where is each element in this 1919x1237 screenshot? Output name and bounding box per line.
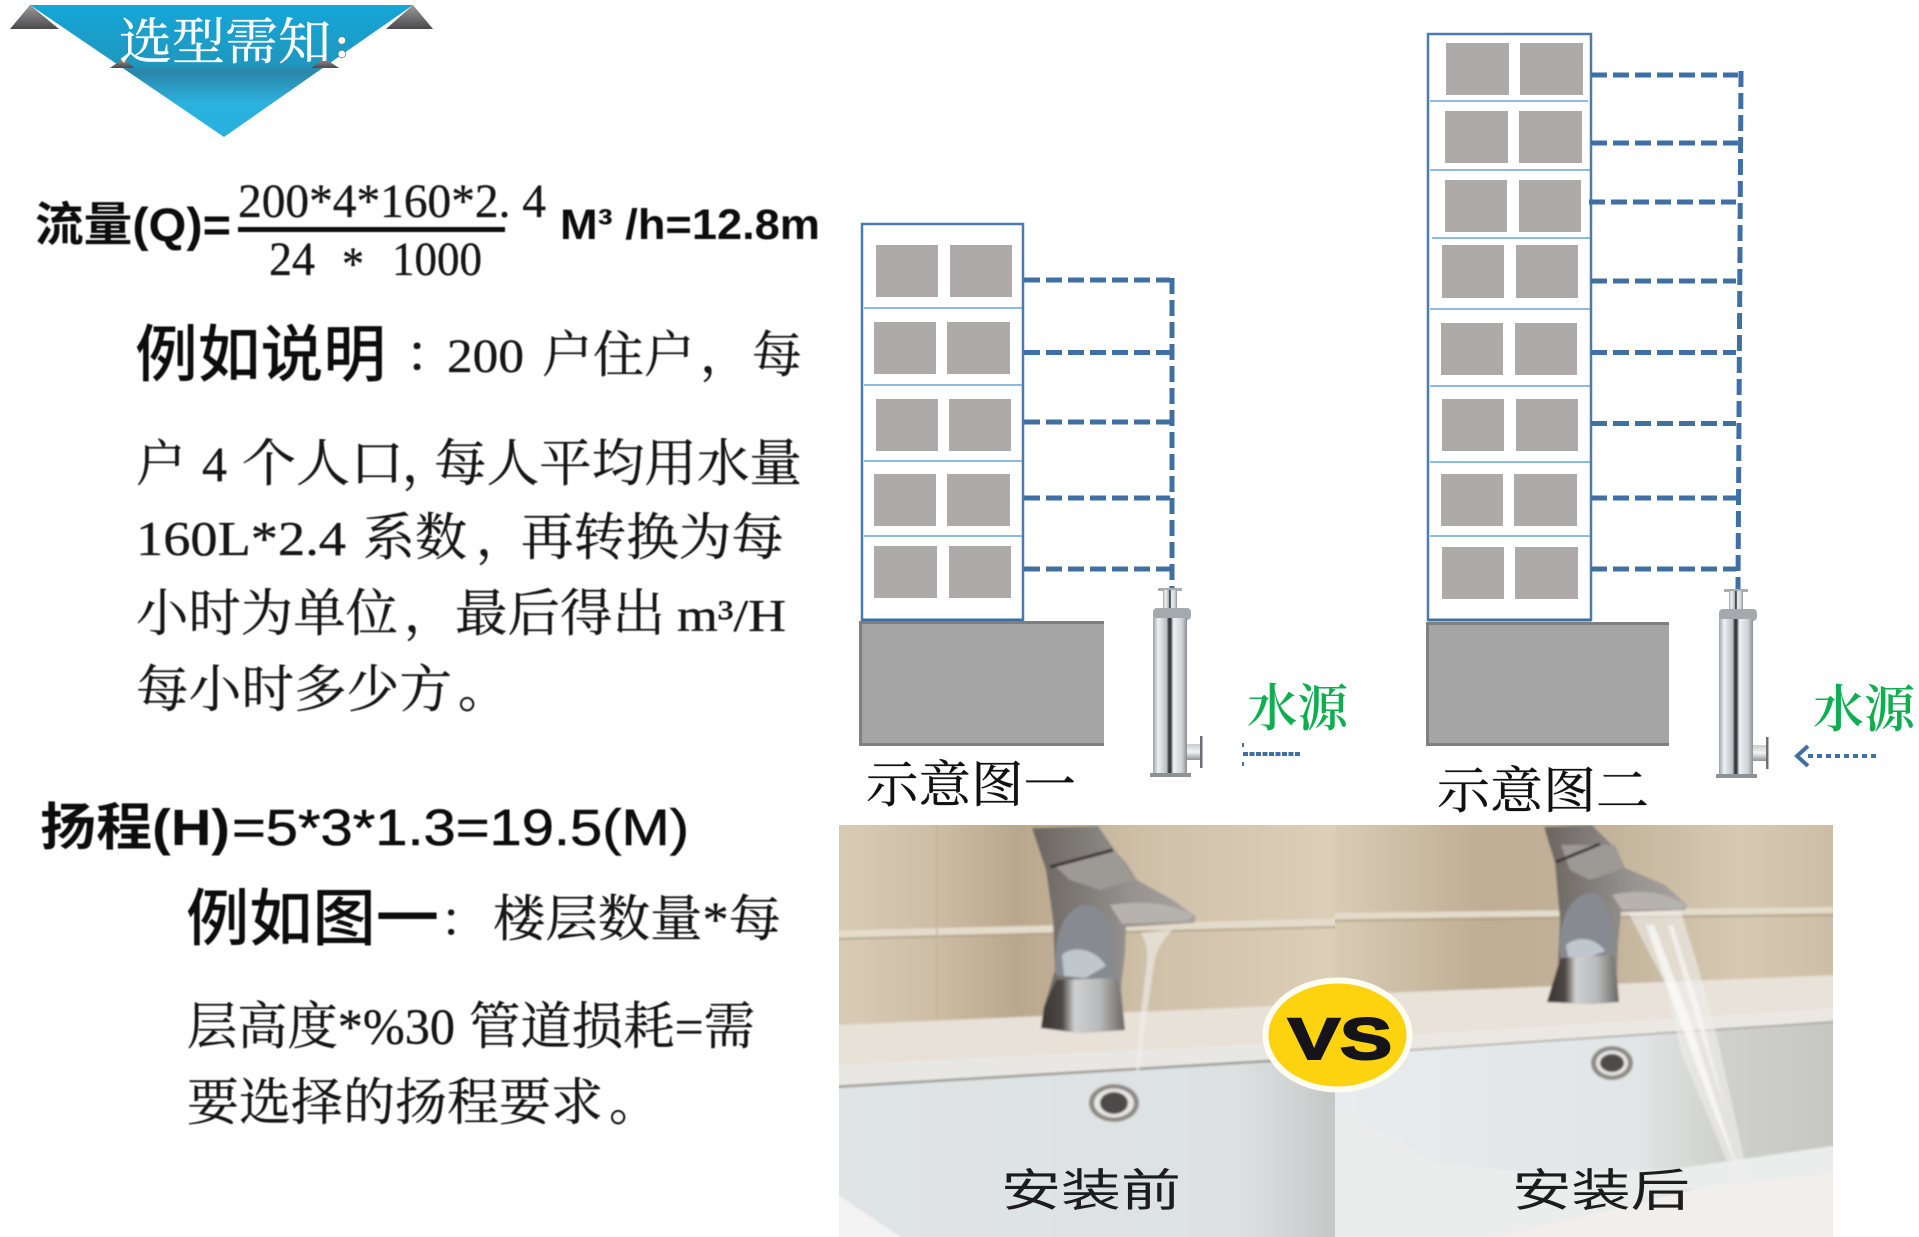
flow explanation text: 户住户: [542, 327, 695, 383]
building one: [862, 224, 1023, 620]
flow formula: 200*4*160*2. 4: [238, 175, 546, 228]
head explanation text: ：: [440, 881, 488, 950]
flow explanation text: 每人平均用水量: [434, 437, 802, 493]
flow explanation text: [135, 304, 802, 719]
diagram one: [859, 224, 1350, 817]
faucet: [1544, 825, 1687, 1004]
filter unit one: [1150, 588, 1202, 777]
water source label two: 水源: [1813, 668, 1917, 742]
water source label one: 水源: [1247, 667, 1350, 741]
flow explanation text: ，: [476, 510, 526, 566]
flow explanation text: ，: [700, 327, 750, 383]
faucet: [1032, 826, 1196, 1033]
label: before: 安装前: [1001, 1154, 1181, 1219]
flow formula: M³ /h=12.8m: [560, 201, 820, 249]
pipes one: [1024, 278, 1172, 588]
badge: VS: [1266, 980, 1410, 1090]
flow explanation text: m³/H: [677, 590, 786, 641]
flow explanation text: ：: [405, 312, 457, 387]
filter unit two: [1716, 589, 1768, 778]
badge: VS: VS: [1288, 1007, 1392, 1072]
flow explanation text: 200: [447, 330, 524, 383]
caption two: 示意图二: [1437, 751, 1649, 823]
overflow hole: [1089, 1084, 1139, 1122]
head explanation text: 楼层数量*每: [493, 891, 781, 947]
foundation one: [859, 621, 1104, 746]
thin water stream: [1136, 929, 1173, 1072]
pipes two: [1589, 71, 1741, 590]
flow explanation text: ，: [404, 586, 454, 642]
banner: 选型需知: 选型需知: [119, 2, 331, 74]
head explanation text: 。: [609, 1075, 659, 1131]
banner: 选型需知: [10, 2, 433, 137]
flow explanation text: 例如说明: [135, 304, 386, 394]
flow formula: *: [342, 238, 364, 291]
flow explanation text: 每: [752, 327, 802, 383]
flow explanation text: 系数: [363, 511, 467, 567]
flow explanation text: 小时为单位: [136, 587, 398, 643]
head formula: [40, 799, 689, 856]
head formula: 扬程(H): [40, 799, 230, 856]
head formula: =5*3*1.3=19.5(M): [232, 799, 689, 856]
flow formula: 1000: [392, 233, 482, 286]
arrow: water inflow: [1797, 746, 1876, 766]
flow explanation text: 再转换为每: [521, 511, 784, 567]
overflow hole: [1591, 1046, 1633, 1080]
building two: [1428, 34, 1591, 620]
flow explanation text: 4: [202, 436, 227, 492]
flow formula: 流量(Q)=: [35, 198, 231, 251]
flow explanation text: 户: [136, 436, 186, 492]
flow explanation text: 160L*2.4: [136, 511, 346, 566]
flow formula: [35, 175, 820, 291]
head explanation text: 例如图一: [186, 868, 439, 958]
photo: before installation: [835, 820, 1340, 1237]
label: after: 安装后: [1512, 1154, 1690, 1219]
flow explanation text: 最后得出: [455, 587, 665, 643]
head explanation text: 要选择的扬程要求: [187, 1076, 603, 1132]
head explanation text: 管道损耗=需: [469, 1000, 755, 1056]
strong water stream: [1628, 910, 1744, 1162]
foundation two: [1426, 622, 1669, 746]
flow explanation text: ，: [402, 436, 452, 492]
photo: after installation: [1330, 820, 1840, 1237]
caption one: 示意图一: [866, 745, 1076, 817]
head explanation text: [186, 868, 781, 1132]
flow explanation text: 。: [458, 662, 508, 718]
head explanation text: 层高度*%30: [187, 1000, 455, 1056]
diagram two: [1426, 34, 1917, 823]
banner: 选型需知: :: [335, 21, 349, 67]
flow explanation text: 每小时多少方: [136, 663, 452, 719]
flow explanation text: 个人口: [242, 437, 404, 493]
flow formula: 24: [269, 233, 315, 286]
